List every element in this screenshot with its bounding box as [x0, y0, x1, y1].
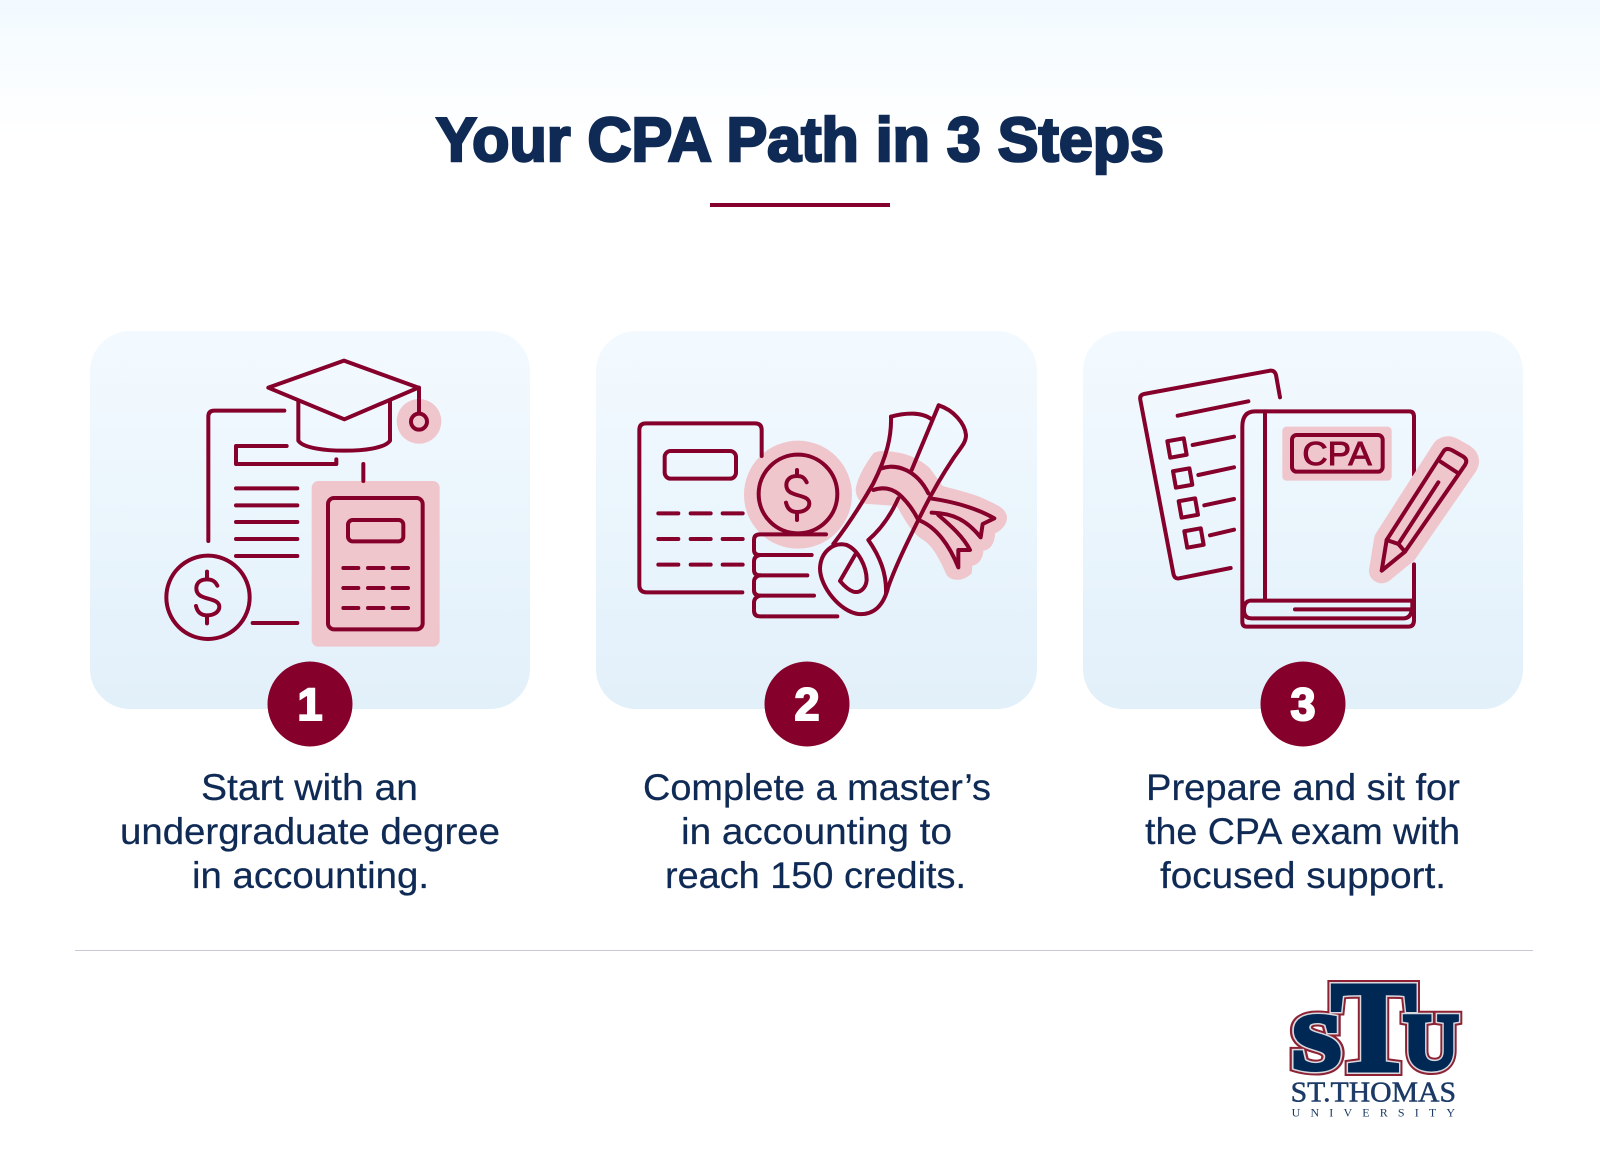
panel: step 2: [596, 331, 1037, 896]
step 1 text: Start with an: [201, 767, 418, 808]
number badge 3: [1260, 662, 1346, 746]
icon: calculator, coins and diploma: [639, 405, 1007, 616]
card 2 background: [596, 331, 1037, 709]
page header gradient background: [0, 0, 1600, 135]
logo: St. Thomas University: T: [1331, 956, 1416, 1098]
panel: step 3: [1083, 331, 1523, 896]
title: Your CPA Path in 3 Steps: [436, 106, 1164, 175]
step 2 text: in accounting to: [681, 811, 952, 852]
card 1 background: [90, 331, 530, 709]
CPA label: CPA: [1302, 436, 1372, 473]
number badge 1: [268, 662, 352, 746]
icon: checklist, CPA book and pencil: [1140, 371, 1466, 627]
logo: St. Thomas University: UNIVERSITY: [1292, 1106, 1455, 1120]
step 3 text: the CPA exam with: [1145, 811, 1460, 852]
logo: St. Thomas University: U: [1403, 999, 1458, 1086]
step 2 text: Complete a master’s: [643, 767, 991, 808]
number badge 2: 2: [794, 679, 820, 730]
footer divider: [75, 950, 1533, 951]
step 1 text: [120, 767, 500, 896]
panel: step 1: [90, 331, 530, 896]
icon: pencil: [1382, 449, 1466, 571]
step 1 text: in accounting.: [192, 855, 429, 896]
step 2 text: reach 150 credits.: [665, 855, 966, 896]
number badge 2: [764, 662, 850, 746]
icon: graduation cap, document, calculator and coin: [166, 361, 441, 647]
logo: St. Thomas University: T: [1331, 956, 1416, 1098]
logo: St. Thomas University: S: [1292, 999, 1342, 1086]
logo: St. Thomas University: U: [1403, 999, 1458, 1086]
logo: St. Thomas University: [1291, 956, 1458, 1120]
step 3 text: Prepare and sit for: [1146, 767, 1460, 808]
card 3 background: [1083, 331, 1523, 709]
step 2 text: [643, 767, 991, 896]
logo: St. Thomas University: S: [1292, 999, 1342, 1086]
step 1 text: undergraduate degree: [120, 811, 500, 852]
step 3 text: focused support.: [1160, 855, 1446, 896]
number badge 1: 1: [297, 679, 323, 730]
logo: St. Thomas University: ST.THOMAS: [1291, 1078, 1456, 1109]
number badge 3: 3: [1290, 679, 1316, 730]
logo: St. Thomas University: U: [1403, 999, 1458, 1086]
title underline: [710, 203, 890, 207]
logo: St. Thomas University: S: [1292, 999, 1342, 1086]
logo: St. Thomas University: T: [1331, 956, 1416, 1098]
step 3 text: [1145, 767, 1460, 896]
